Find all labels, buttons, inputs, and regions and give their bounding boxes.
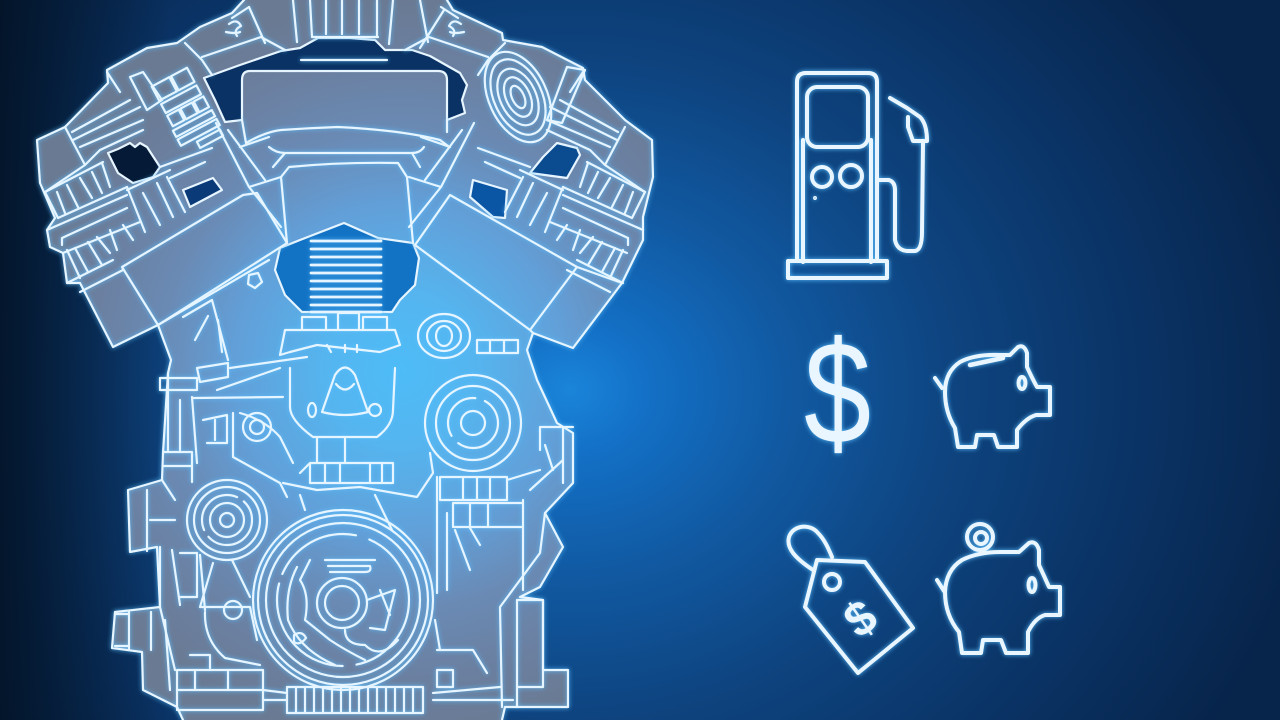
bars beside panel <box>127 148 212 232</box>
outer contour <box>37 0 653 720</box>
icon: fuel pump <box>788 73 927 278</box>
central fins <box>311 241 381 312</box>
capsule bar and lower fins <box>47 195 140 278</box>
right upper bar <box>547 67 585 123</box>
engine outlines <box>37 0 653 720</box>
pump base <box>788 261 887 278</box>
pump indicator mark <box>814 197 816 199</box>
lower cover <box>281 163 413 243</box>
icon: piggy bank <box>935 346 1050 447</box>
top band fins <box>249 0 444 48</box>
icon: dollar sign: $ <box>804 312 871 475</box>
lower left chamber with bolt <box>165 601 263 710</box>
left cylinder head panel <box>122 193 287 325</box>
wing of cylinder head, left side <box>45 7 285 292</box>
left small bolt group <box>203 413 293 497</box>
bolt near head <box>248 273 262 288</box>
right window opening <box>530 143 580 178</box>
lower lines above panel <box>67 260 123 292</box>
crank inner shapes <box>287 560 398 665</box>
fuel hose and nozzle <box>877 98 927 251</box>
pump screen <box>807 87 868 147</box>
right clamp <box>530 427 573 490</box>
icon: price tag <box>788 527 913 673</box>
top band edges <box>185 7 285 75</box>
central fin opening <box>275 223 419 312</box>
right lower opening <box>470 180 507 218</box>
centre wedge lines <box>216 123 474 227</box>
icon: piggy bank with coin <box>937 524 1060 653</box>
left clamp and column <box>115 480 257 670</box>
right cylinder head panel <box>415 195 622 333</box>
bell housing and frame <box>290 368 395 437</box>
mirrored right wing <box>405 7 645 292</box>
central rows of blocks <box>283 437 433 530</box>
right wing spiral <box>471 41 565 153</box>
left window opening <box>108 143 160 183</box>
pump body <box>797 73 877 262</box>
left pulley <box>187 480 267 560</box>
engine line drawing <box>37 0 653 720</box>
end block and upper fins <box>45 72 143 192</box>
second pig body <box>945 542 1060 653</box>
hump bar <box>301 59 387 61</box>
crank pulley <box>253 510 433 690</box>
right side block rows <box>437 470 545 707</box>
mid fins <box>45 162 127 218</box>
bridge between covers <box>242 120 448 167</box>
coin <box>967 524 993 550</box>
left edge vignette <box>0 0 170 720</box>
left lower opening <box>183 178 222 207</box>
upper central plate <box>280 313 400 355</box>
upper arch opening <box>204 38 467 122</box>
lower right covers <box>433 600 543 707</box>
engine silhouette <box>37 0 653 720</box>
left upper block grid <box>130 67 225 155</box>
pump dials <box>812 165 862 187</box>
oil pan fins <box>263 687 423 713</box>
small upper right pulley <box>418 314 518 358</box>
lower left bracket lines <box>158 260 307 482</box>
right pulley <box>425 375 521 471</box>
tag dollar sign: $ <box>835 590 887 649</box>
